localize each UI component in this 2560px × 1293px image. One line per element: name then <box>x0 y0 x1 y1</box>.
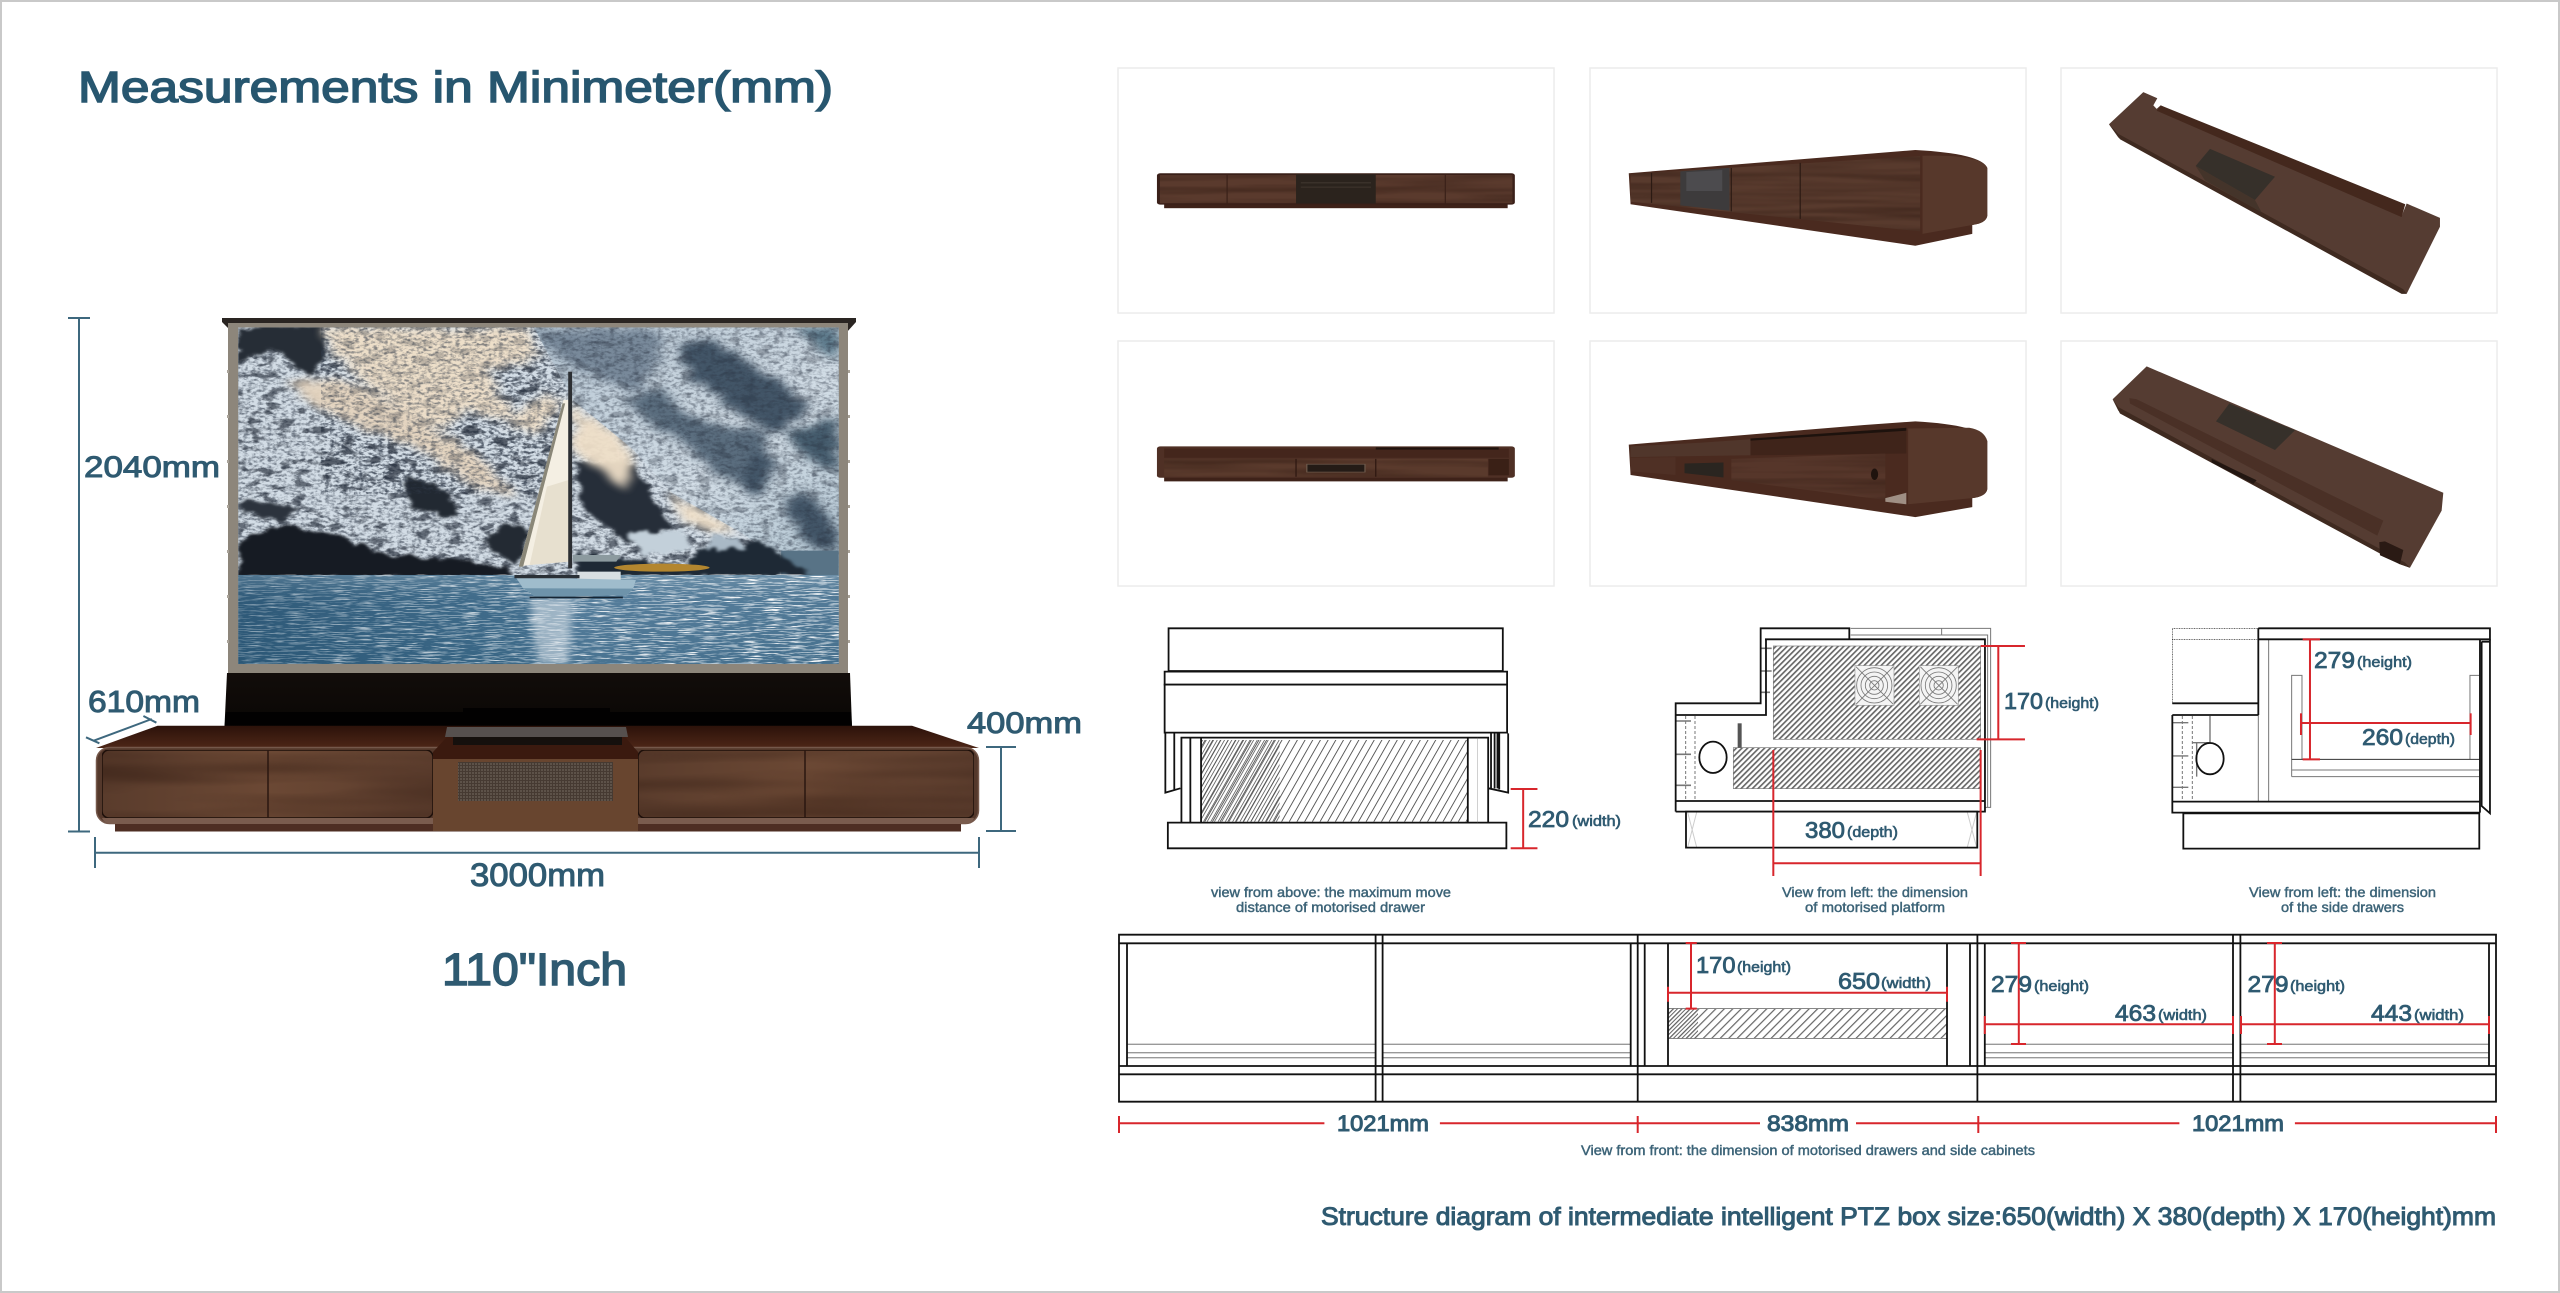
label: 463 width: (width) <box>2158 1008 2207 1024</box>
platform line drawing <box>1676 628 2025 876</box>
cabinet lower lip highlight <box>102 818 974 824</box>
label: 443 width: (width) <box>2414 1008 2464 1024</box>
hatched platform areas <box>1733 646 1981 789</box>
label: 279 height: (height) <box>2357 655 2412 671</box>
cabinet thumbnail from above open <box>2113 366 2443 568</box>
caption: distance of motorised drawer <box>1236 899 1425 915</box>
diagram: view from left, motorised platform <box>1676 628 2099 915</box>
hatched drawer area <box>1201 740 1468 822</box>
panel: product photo drawers open angled <box>1590 341 2026 586</box>
fan right <box>1919 666 1958 705</box>
panel: product photo top view <box>2061 68 2497 313</box>
label: 279 height: (height) <box>2290 979 2345 995</box>
label: 170 height <box>1696 952 1791 978</box>
label: 380 depth <box>1805 817 1898 843</box>
dimension: 3000mm width: 3000mm <box>470 857 605 893</box>
label: 260 depth <box>2362 724 2455 750</box>
cabinet plinth <box>115 824 961 832</box>
label: 260 depth: (depth) <box>2405 732 2455 748</box>
fan left <box>1855 666 1894 705</box>
drawer dividers <box>268 750 805 818</box>
dimension: 610mm depth: 610mm <box>88 684 200 719</box>
label: 170 height: (height) <box>2045 696 2099 712</box>
label: 279 height <box>2314 647 2412 673</box>
label: 220 width <box>1528 806 1621 832</box>
projector top <box>445 727 628 737</box>
right drawers <box>638 750 974 818</box>
label: 279 height: 279 <box>2248 971 2288 997</box>
cabinet thumbnail angled <box>1629 150 1987 246</box>
red inner dimension lines <box>1668 943 2489 1044</box>
panel: product photo front view <box>1118 68 1554 313</box>
dimension: 400mm cabinet height <box>967 707 1082 831</box>
screen lower black leader <box>224 673 852 726</box>
label: 170 height: (height) <box>1737 960 1791 976</box>
label: 443 width <box>2371 1000 2464 1026</box>
label: 170 height: 170 <box>1696 952 1736 978</box>
diagram: front view of motorised drawers and side cabinets <box>1119 935 2496 1158</box>
overall width dimension row: 1021mm <box>1337 1111 1429 1136</box>
label: 220 width: 220 <box>1528 806 1569 832</box>
label: 170 height <box>2004 688 2099 714</box>
cabinet top surface <box>96 726 979 748</box>
side drawer line drawing <box>2172 628 2490 849</box>
right mountain <box>504 327 839 577</box>
black band and projector recess <box>224 708 852 727</box>
label: 380 depth: 380 <box>1805 817 1845 843</box>
centre module <box>433 758 638 831</box>
footer note: PTZ box size: Structure diagram of intermediate intelligent PTZ box size:650(width) X 380(depth) X 170(height)mm <box>1321 1203 2496 1231</box>
caption <box>2249 884 2436 915</box>
front view hatched platform <box>1668 1008 1947 1038</box>
cabinet thumbnail open angled <box>1629 421 1987 517</box>
overall width dimension row: 838mm <box>1767 1111 1849 1136</box>
label: 650 width: (width) <box>1881 976 1931 992</box>
label: 279 height <box>1991 971 2089 997</box>
caption: View from front: the dimension of motorised drawers and side cabinets <box>1581 1142 2035 1158</box>
screen size label: 110"Inch <box>442 944 627 995</box>
panel: product photo angled view <box>1590 68 2026 313</box>
label: 279 height: 279 <box>1991 971 2032 997</box>
label: 650 width <box>1838 968 1931 994</box>
caption: of the side drawers <box>2281 899 2404 915</box>
label: 380 depth: (depth) <box>1847 825 1898 841</box>
drawer line drawing <box>1165 628 1537 848</box>
overall width dimension row <box>1119 1111 2496 1136</box>
overall width dimension row: 1021mm <box>2192 1111 2284 1136</box>
label: 279 height: (height) <box>2034 979 2089 995</box>
label: 463 width <box>2115 1000 2207 1026</box>
screen tab tensioners <box>227 370 850 643</box>
orange kelp on shore <box>614 564 710 572</box>
label: 260 depth: 260 <box>2362 724 2403 750</box>
cabinet body frame <box>96 748 978 824</box>
caption: View from left: the dimension <box>1782 884 1968 900</box>
caption: of motorised platform <box>1805 899 1945 915</box>
dimension: 3000mm width <box>95 837 979 893</box>
cabinet thumbnail from above <box>2109 92 2440 294</box>
diagram: view from above, motorised drawer <box>1165 628 1621 915</box>
label: 170 height: 170 <box>2004 688 2043 714</box>
caption <box>1211 884 1451 915</box>
drawer runners <box>1127 1044 2489 1058</box>
projector vent <box>453 736 622 745</box>
label: 650 width: 650 <box>1838 968 1880 994</box>
dimension: 610mm depth <box>86 684 200 743</box>
screen housing bar <box>222 318 856 332</box>
dimension: 2040mm height <box>68 318 220 832</box>
label: 443 width: 443 <box>2371 1000 2412 1026</box>
label: 220 width: (width) <box>1572 814 1621 830</box>
label: 463 width: 463 <box>2115 1000 2156 1026</box>
caption <box>1782 884 1968 915</box>
caption: view from above: the maximum move <box>1211 884 1451 900</box>
label: 279 height <box>2248 971 2345 997</box>
left drawers <box>102 750 433 818</box>
cabinet outline <box>1119 935 2496 1102</box>
caption: View from left: the dimension <box>2249 884 2436 900</box>
diagram: view from left, side drawers <box>2172 628 2490 915</box>
dimension: 2040mm height: 2040mm <box>84 451 220 484</box>
shoreline rocks <box>577 530 807 577</box>
cabinet thumbnail front <box>1157 173 1515 208</box>
panel: product photo from above open <box>2061 341 2497 586</box>
left mountain <box>238 327 802 578</box>
sailboat <box>514 372 636 598</box>
panel: screen and cabinet product view <box>96 318 979 832</box>
screen photo: sailboat in a snowy fjord <box>238 327 839 664</box>
panel: product photo drawers open front <box>1118 341 1554 586</box>
centre grille <box>458 762 613 801</box>
dimension: 400mm cabinet height: 400mm <box>967 707 1082 740</box>
label: 279 height: 279 <box>2314 647 2355 673</box>
screen frame <box>228 323 848 673</box>
water <box>238 575 839 664</box>
centre shelf <box>433 737 638 759</box>
cabinet thumbnail open front <box>1157 446 1515 481</box>
title: Measurements in Minimeter(mm) <box>78 63 833 112</box>
